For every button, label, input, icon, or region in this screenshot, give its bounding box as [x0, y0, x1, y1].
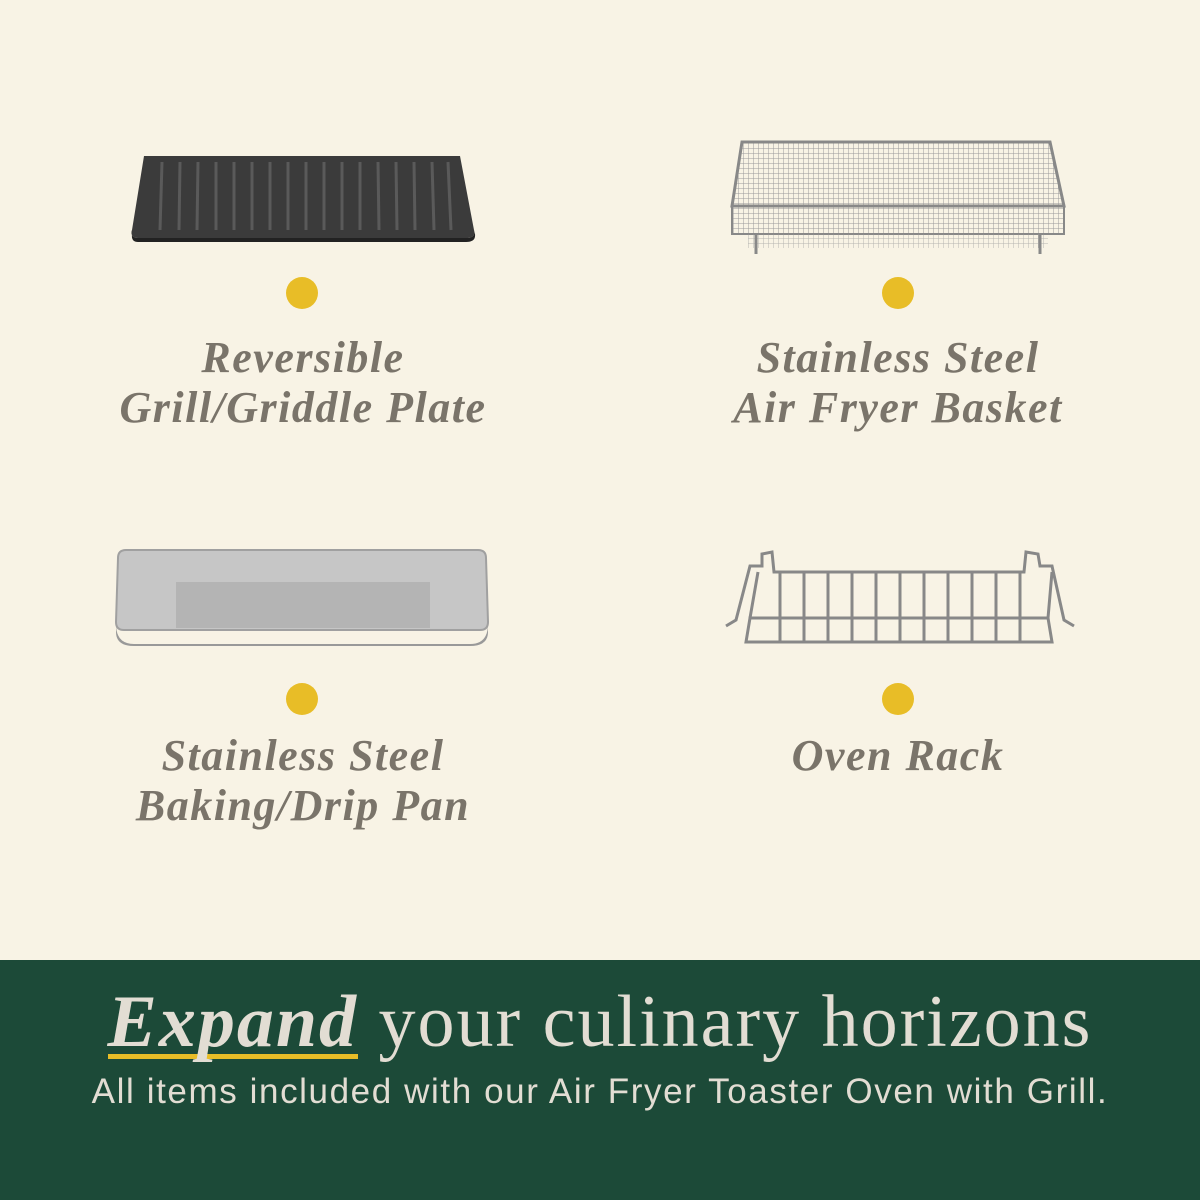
- subtitle: All items included with our Air Fryer Toaster Oven with Grill.: [92, 1072, 1108, 1111]
- label: basket: Air Fryer Basket: [733, 383, 1063, 432]
- banner: [0, 960, 1200, 1200]
- heading: Expand: [108, 981, 358, 1063]
- icon: baking pan: [115, 549, 489, 646]
- dot: pan: [286, 683, 318, 715]
- icon: grill plate: [132, 156, 476, 242]
- icon: air fryer basket: [730, 140, 1066, 254]
- dot: grill plate: [286, 277, 318, 309]
- dot: basket: [882, 277, 914, 309]
- label: grill plate: Reversible: [201, 333, 405, 382]
- label: basket: Stainless Steel: [757, 333, 1039, 382]
- label: grill plate: Grill/Griddle Plate: [119, 383, 487, 432]
- dot: rack: [882, 683, 914, 715]
- label: grill plate: [119, 333, 487, 432]
- icon: oven rack: [725, 550, 1075, 644]
- label: pan: Stainless Steel: [162, 731, 444, 780]
- label: rack: Oven Rack: [792, 731, 1004, 780]
- label: pan: [136, 731, 470, 830]
- label: pan: Baking/Drip Pan: [136, 781, 470, 830]
- label: basket: [731, 333, 1063, 432]
- heading: your culinary horizons: [379, 981, 1092, 1063]
